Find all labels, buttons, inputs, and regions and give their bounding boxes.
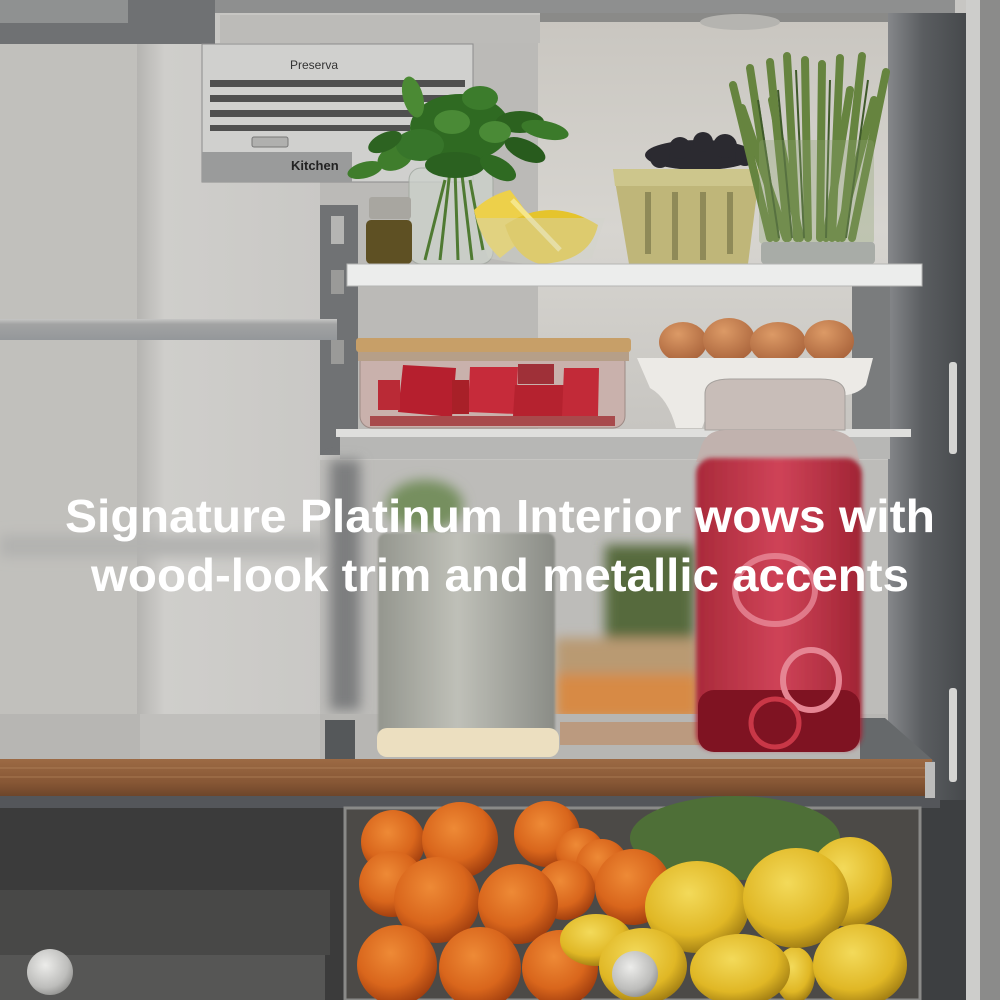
wood-look shelf and glass [0,714,940,808]
berry basket [613,132,760,264]
pickled onion jar [696,379,862,752]
lower shelf edge [336,429,911,459]
upper glass shelf [347,264,922,286]
spice jar [366,197,412,264]
right produce drawer [345,796,920,1000]
shelf rail bracket [320,205,890,455]
vent panel with Preserva label: Preserva [290,58,338,72]
watermelon container with wood lid [356,338,631,428]
egg holder with eggs [637,318,873,428]
title: Signature Platinum Interior wows with [65,490,935,542]
title [65,490,935,601]
blurred background in title band [0,460,700,720]
title: wood-look trim and metallic accents [90,549,909,601]
lemon bowl [474,190,605,264]
asparagus in glass [733,56,886,264]
vent panel with Preserva label: Kitchen [291,158,339,173]
door bin rail [0,319,337,340]
top trim [0,0,955,44]
vent panel with Preserva label [202,44,473,182]
ceramic canister [377,533,559,757]
right side wall and door trim [888,0,1000,1000]
herb jar and parsley [346,74,570,264]
left drawer [0,808,345,1000]
